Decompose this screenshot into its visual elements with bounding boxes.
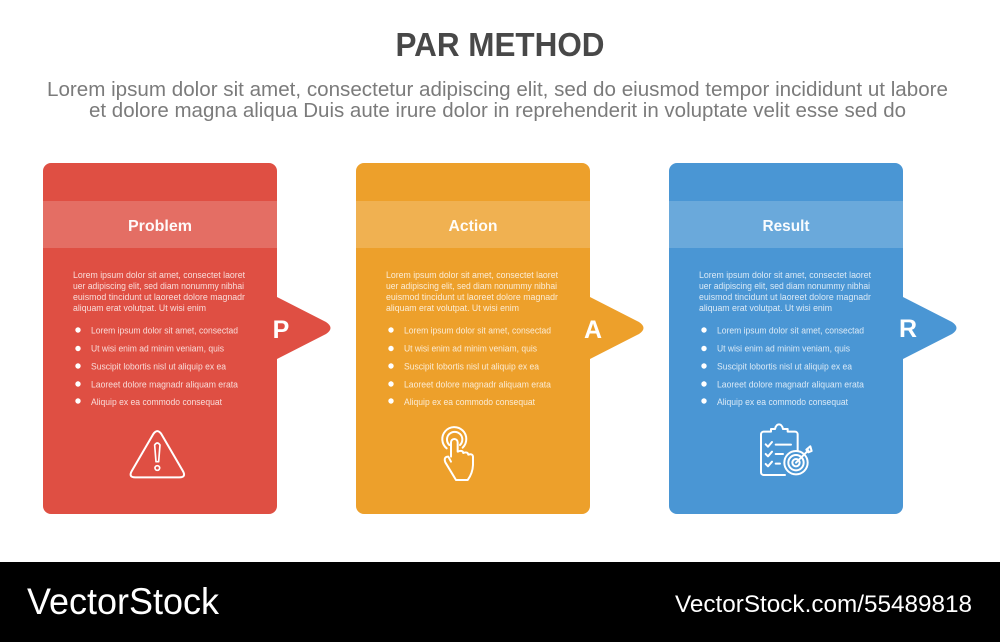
description: aliquam erat volutpat. Ut wisi enim [386,303,519,313]
bullet list: Lorem ipsum dolor sit amet, consectad [91,326,238,336]
footer image id: VectorStock.com/55489818 [675,591,972,618]
description: Lorem ipsum dolor sit amet, consectet laoret [73,270,245,280]
bullet list: Aliquip ex ea commodo consequat [91,397,222,407]
panel: result [669,163,956,514]
description: euismod tincidunt ut laoreet dolore magnadr [699,292,871,302]
subtitle text [47,79,948,122]
bullet list: Ut wisi enim ad minim veniam, quis [404,344,537,354]
description: Lorem ipsum dolor sit amet, consectet laoret [386,270,558,280]
heading: Action [448,218,498,235]
description: aliquam erat volutpat. Ut wisi enim [699,303,832,313]
description: uer adipiscing elit, sed diam nonummy nibhai [699,281,870,291]
heading: Result [762,218,810,235]
description: Lorem ipsum dolor sit amet, consectet laoret [699,270,871,280]
bullet list [701,326,864,407]
bullet list: Lorem ipsum dolor sit amet, consectad [404,326,551,336]
bullet list: Ut wisi enim ad minim veniam, quis [91,344,224,354]
icon: clipboard with target [761,424,812,475]
footer logo: VectorStock [27,581,219,622]
bullet list: Laoreet dolore magnadr aliquam erata [717,380,864,390]
bullet list: Suscipit lobortis nisl ut aliquip ex ea [91,362,226,372]
bullet list: Suscipit lobortis nisl ut aliquip ex ea [717,362,852,372]
description [699,270,871,313]
icon: warning triangle [131,431,184,477]
card shape with arrow [356,163,644,514]
subtitle text: Lorem ipsum dolor sit amet, consectetur adipiscing elit, sed do eiusmod tempor incididunt ut labore [47,79,948,101]
bullet list: Aliquip ex ea commodo consequat [717,397,848,407]
description: aliquam erat volutpat. Ut wisi enim [73,303,206,313]
bullet list [75,326,238,407]
bullet list: Laoreet dolore magnadr aliquam erata [404,380,551,390]
heading: Problem [128,218,192,235]
subtitle text: et dolore magna aliqua Duis aute irure dolor in reprehenderit in voluptate velit esse sed do [89,100,906,122]
heading band [43,201,277,248]
bullet list: Aliquip ex ea commodo consequat [404,397,535,407]
card shape with arrow [43,163,330,514]
bullet list [388,326,551,407]
bullet list: Suscipit lobortis nisl ut aliquip ex ea [404,362,539,372]
footer bar [0,562,1000,642]
description: euismod tincidunt ut laoreet dolore magnadr [386,292,558,302]
heading band [356,201,590,248]
bullet list: Laoreet dolore magnadr aliquam erata [91,380,238,390]
panel: problem [43,163,330,514]
description: euismod tincidunt ut laoreet dolore magnadr [73,292,245,302]
heading band [669,201,903,248]
description: uer adipiscing elit, sed diam nonummy nibhai [386,281,557,291]
panel: action [356,163,644,514]
bullet list: Ut wisi enim ad minim veniam, quis [717,344,850,354]
card shape with arrow [669,163,956,514]
description [386,270,558,313]
description: uer adipiscing elit, sed diam nonummy nibhai [73,281,244,291]
letter P: P [273,316,289,344]
description [73,270,245,313]
letter A: A [584,316,602,344]
title: PAR METHOD [396,26,604,63]
letter R: R [899,315,917,343]
icon: pointing hand [442,427,473,480]
bullet list: Lorem ipsum dolor sit amet, consectad [717,326,864,336]
